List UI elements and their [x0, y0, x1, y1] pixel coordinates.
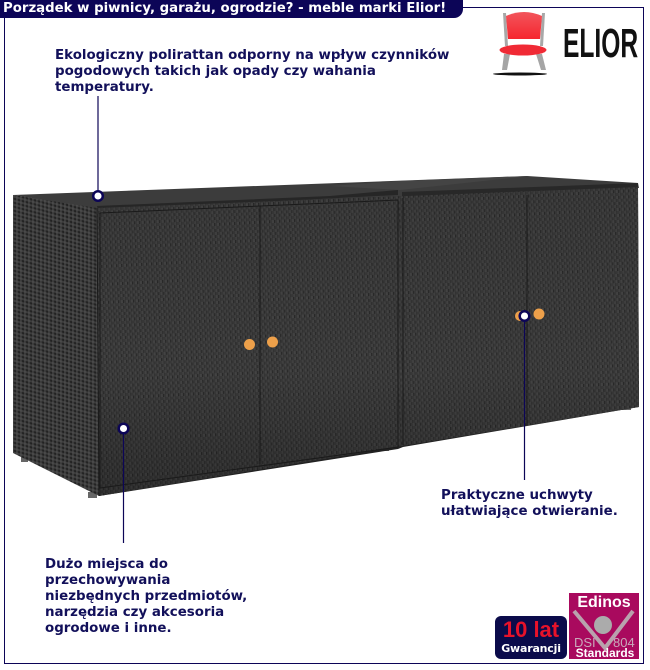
cabinet side panel	[13, 195, 99, 496]
text: handles callout: ułatwiające otwieranie.	[441, 504, 618, 519]
badge: Edinos standards: Edinos	[577, 594, 631, 611]
icon: red chair logo	[493, 12, 547, 76]
text: material callout	[55, 48, 449, 95]
badge: Edinos standards	[569, 593, 639, 659]
text: storage callout: przechowywania	[45, 573, 170, 588]
cabinet front	[97, 187, 639, 496]
text: handles callout: Praktyczne uchwyty	[441, 488, 593, 503]
badge: Edinos standards: DSI	[574, 635, 596, 650]
cabinet feet	[21, 405, 631, 498]
logo wordmark: ELIOR	[563, 20, 638, 66]
badge: Edinos standards: 804	[613, 635, 635, 650]
callout markers	[93, 191, 529, 433]
title banner: Porządek w piwnicy, garażu, ogrodzie? - meble marki Elior!	[3, 1, 446, 16]
text: storage callout: narzędzia czy akcesoria	[45, 605, 224, 620]
text: handles callout	[441, 488, 618, 519]
badge: 10 lat warranty	[495, 616, 567, 659]
text: material callout: pogodowych takich jak opady czy wahania	[55, 64, 376, 79]
door handles	[244, 308, 544, 350]
callout lines	[98, 96, 524, 543]
text: storage callout: ogrodowe i inne.	[45, 621, 172, 636]
text: storage callout: Dużo miejsca do	[45, 557, 168, 572]
door seams and edges	[97, 195, 527, 496]
text: material callout: temperatury.	[55, 80, 154, 95]
warranty label: Gwarancji	[501, 642, 561, 655]
warranty years: 10 lat	[503, 617, 559, 642]
text: storage callout: niezbędnych przedmiotów,	[45, 589, 247, 604]
text: material callout: Ekologiczny polirattan odporny na wpływ czynników	[55, 48, 449, 63]
text: storage callout	[45, 557, 247, 636]
cabinet top	[13, 176, 639, 208]
